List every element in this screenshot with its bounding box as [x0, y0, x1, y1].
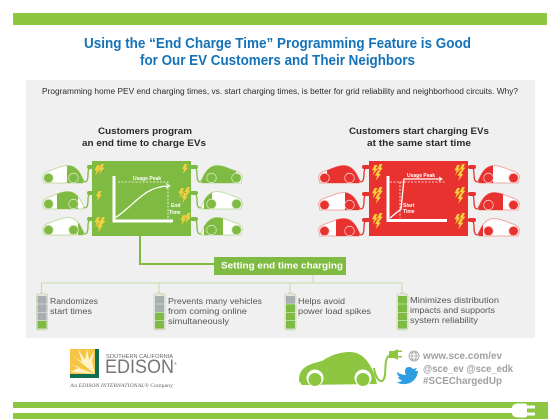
intro text: Programming home PEV end charging times, vs. start charging times, is better for grid reliability and neighborhood circuits. Why?: [42, 87, 519, 96]
battery 3 of 4: [285, 292, 296, 330]
chart: start time curve: Usage Peak: [407, 173, 435, 179]
title: [84, 36, 471, 69]
benefit: randomizes start times: [36, 292, 98, 330]
logo: Southern California Edison: ®: [174, 361, 177, 366]
label: setting end time charging: [214, 257, 346, 275]
green box bolts: [94, 164, 191, 232]
social links: @sce_ev @sce_edk: [423, 364, 513, 375]
icon: twitter bird: [397, 367, 418, 384]
icon: sunburst square: [70, 349, 99, 378]
red box bolts: [372, 164, 465, 229]
logo: Southern California Edison: SOUTHERN CALIFORNIA: [106, 354, 173, 360]
benefit: randomizes start times: Randomizes: [50, 297, 98, 306]
benefit: helps avoid spikes: power load spikes: [298, 307, 371, 316]
benefit: prevents many vehicles: [154, 292, 262, 330]
benefit: prevents many vehicles: simultaneously: [168, 317, 229, 326]
logo: Southern California Edison: EDISON: [105, 357, 174, 378]
bottom bar with plug: [13, 402, 548, 419]
panel: green cars, end time: [42, 161, 242, 236]
red cars right: [468, 165, 520, 236]
benefit: minimizes distribution impacts: [397, 292, 499, 330]
heading: customers start charging: Customers start charging EVs: [349, 126, 489, 137]
heading: customers start charging: at the same start time: [367, 138, 471, 149]
benefit: randomizes start times: start times: [50, 307, 92, 316]
benefit: helps avoid spikes: Helps avoid: [298, 297, 345, 306]
red cars left: [318, 165, 370, 236]
red box: [369, 161, 468, 236]
label: setting end time charging: Setting end time charging: [221, 260, 343, 272]
logo: Southern California Edison: An EDISON INTERNATIONAL ® Company: [70, 382, 173, 389]
social links: [422, 351, 513, 387]
title: for Our EV Customers and Their Neighbors: [140, 53, 415, 69]
chart: end time curve: Usage Peak: [133, 176, 161, 182]
chart: start time curve: Time: [403, 209, 415, 215]
chart: start time curve: [388, 173, 447, 220]
chart: end time curve: [114, 176, 181, 221]
panel: red cars, start time: [318, 161, 520, 236]
icon: globe: [409, 351, 419, 361]
battery 4 of 4: [397, 292, 408, 330]
chart: start time curve: Start: [403, 203, 415, 209]
top green bar: [13, 13, 547, 25]
benefit: helps avoid spikes: [285, 292, 371, 330]
green box: [92, 161, 191, 236]
logo: Southern California Edison: [70, 349, 177, 389]
benefit: minimizes distribution impacts: impacts and supports: [410, 306, 495, 315]
social links: www.sce.com/ev: [422, 351, 502, 362]
green cars left: [42, 165, 95, 235]
heading: customers start charging: [349, 126, 489, 149]
benefit: prevents many vehicles: Prevents many vehicles: [168, 297, 262, 306]
panel: grey background: [26, 80, 535, 338]
battery 2 of 4: [154, 292, 165, 330]
benefit: minimizes distribution impacts: Minimizes distribution: [410, 296, 499, 305]
battery 1 of 4: [36, 292, 48, 330]
chart: end time curve: Time: [169, 210, 181, 216]
benefit: prevents many vehicles: from coming online: [168, 307, 248, 316]
benefit: minimizes distribution impacts: system reliability: [410, 316, 478, 325]
heading: customers program end time: [82, 126, 206, 149]
social links: #SCEChargedUp: [423, 376, 502, 387]
icon: electric car with plug: [299, 350, 402, 386]
green cars right: [190, 165, 242, 235]
title: Using the “End Charge Time” Programming Feature is Good: [84, 36, 471, 52]
chart: end time curve: End: [171, 203, 180, 209]
heading: customers program end time: an end time to charge EVs: [82, 138, 206, 149]
tree connector to benefits: [42, 275, 402, 293]
connector: green box to setting label: [140, 236, 214, 264]
heading: customers program end time: Customers program: [98, 126, 192, 137]
